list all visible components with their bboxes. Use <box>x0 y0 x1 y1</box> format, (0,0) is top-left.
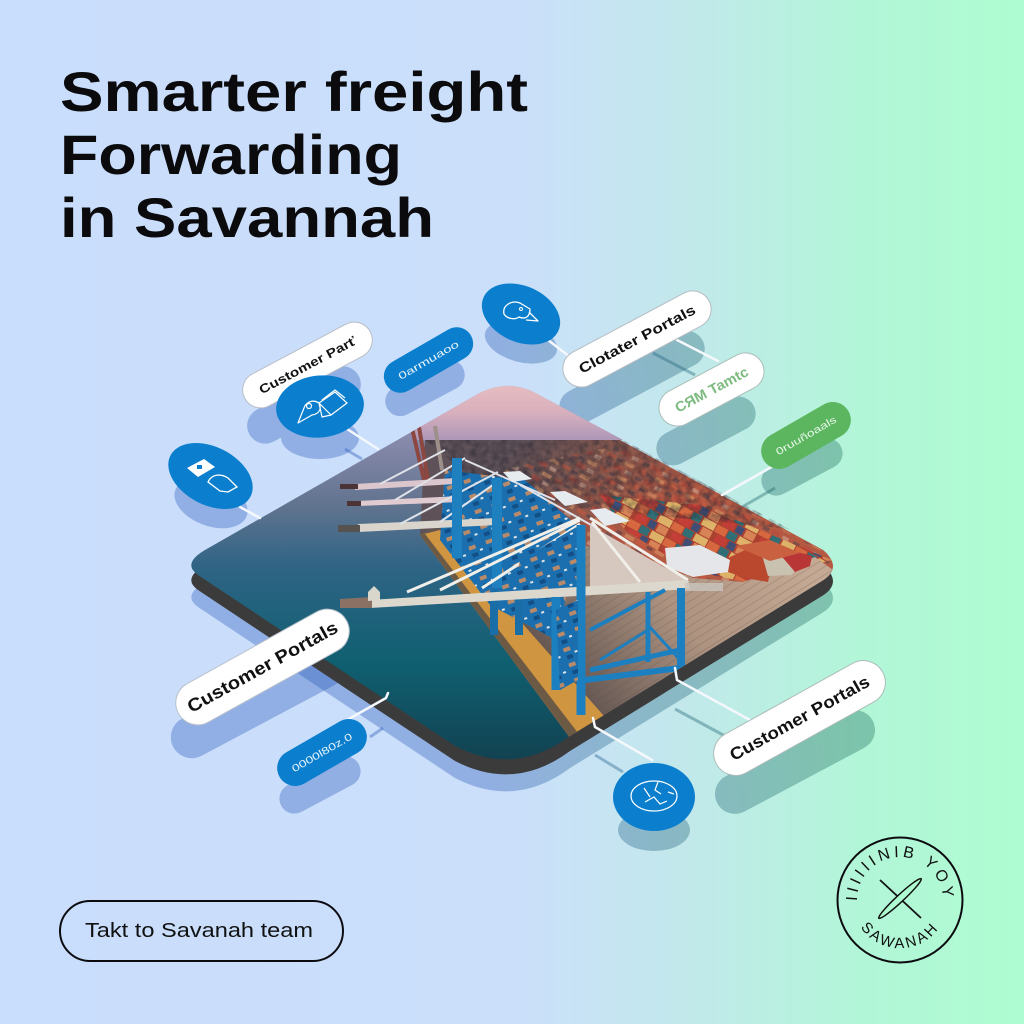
connector shadows <box>345 353 775 772</box>
city dark mottling <box>425 440 800 530</box>
deck <box>422 538 832 737</box>
node: CRM label: CЯM Tamtc <box>672 363 751 416</box>
crane roofs <box>503 471 630 526</box>
white warehouse <box>665 545 730 577</box>
platform dark edge <box>191 401 833 774</box>
node: Customer Portals left label: Customer Portals <box>184 617 341 717</box>
node: Customer Portals left label <box>168 601 357 733</box>
front crane deck <box>590 525 690 590</box>
title <box>60 60 528 249</box>
title: Forwarding <box>60 123 402 186</box>
node: document icon <box>273 371 367 442</box>
back crane legs <box>452 458 523 635</box>
node: blue pill bottom <box>271 712 373 793</box>
front crane cables <box>407 518 688 592</box>
container yard <box>600 495 832 582</box>
stamp badge <box>836 836 964 964</box>
stamp badge: SAWANAH <box>862 922 938 948</box>
node: globe icon <box>613 763 695 831</box>
deck wood lines <box>568 548 832 690</box>
title: in Savannah <box>60 186 434 249</box>
node: Clotater Portals label <box>556 284 718 394</box>
front containers <box>728 540 812 582</box>
node: Customer Part label: Customer Parť <box>257 334 359 397</box>
button <box>60 901 343 961</box>
crane structure behind <box>440 470 582 640</box>
front crane lattice <box>518 527 576 588</box>
sea <box>191 386 590 760</box>
quay edge <box>420 530 604 740</box>
back crane booms <box>338 478 497 532</box>
rear deck gear <box>685 583 723 591</box>
city <box>420 440 833 582</box>
node and pill shadows <box>163 313 882 851</box>
node: Customer Part label <box>236 316 379 414</box>
quay pilings <box>420 534 578 740</box>
node: Customer Portals right label: Customer Portals <box>726 672 873 765</box>
node: Customer Portals right label <box>706 653 893 783</box>
sky <box>415 386 623 440</box>
title: Smarter freight <box>60 60 528 123</box>
port aerial photo <box>191 386 833 760</box>
node: CRM label <box>652 346 771 433</box>
node: Clotater Portals label: Clotater Portals <box>576 301 698 377</box>
node: blue pill bottom: 0000l80z.0 <box>290 731 355 775</box>
node: green pill: 0ruuñoaals <box>774 415 839 458</box>
stamp badge: IIIIIINIB YOY <box>846 846 954 900</box>
node: blue pill top <box>378 321 479 399</box>
platform shadow <box>191 418 833 791</box>
city texture <box>497 446 833 581</box>
back crane cables <box>380 450 600 530</box>
leg lattice <box>556 600 578 690</box>
masts <box>412 426 442 480</box>
node: green pill <box>755 395 857 476</box>
front crane legs <box>556 525 681 715</box>
front crane boom <box>370 580 690 608</box>
button: Takt to Savanah team <box>85 920 313 942</box>
connectors <box>240 340 775 760</box>
node: top icon <box>472 272 570 356</box>
node: left icon <box>157 430 264 522</box>
node: blue pill top: 0armuaoo <box>397 339 462 383</box>
